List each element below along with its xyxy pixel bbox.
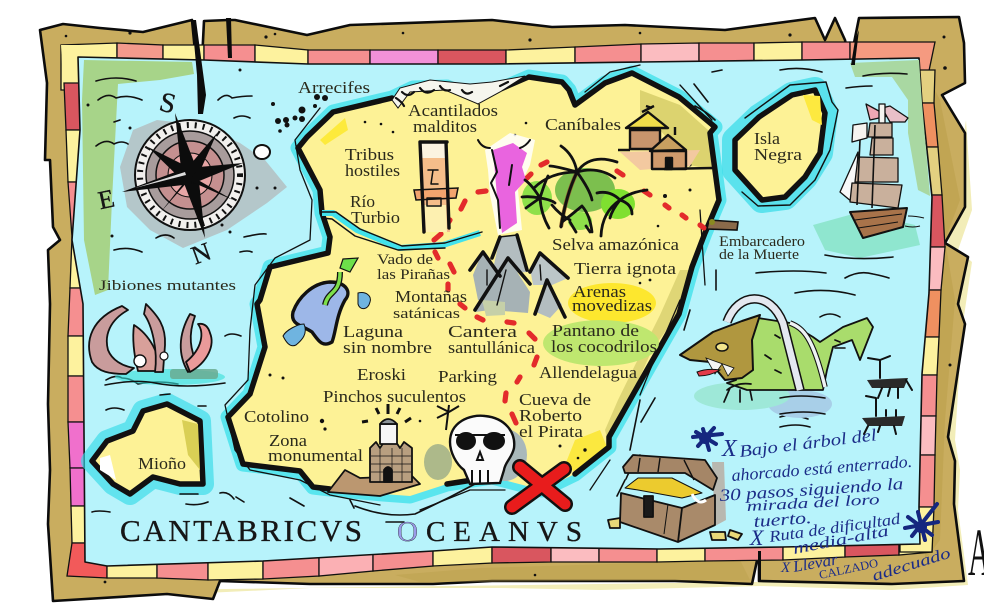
lighthouse bbox=[328, 404, 420, 496]
kraken bbox=[89, 304, 225, 386]
label: Cantera santullánica: Cantera bbox=[448, 322, 518, 341]
label: Embarcadero de la Muerte: Embarcadero bbox=[719, 234, 805, 250]
sea monster bbox=[680, 299, 873, 418]
jetty bbox=[707, 219, 738, 230]
small rock bbox=[254, 145, 270, 159]
volcano and Montañas satánicas bbox=[470, 235, 568, 318]
lagoon bbox=[283, 258, 370, 346]
label: Montañas satánicas: satánicas bbox=[393, 306, 460, 322]
island: Mioño bbox=[92, 404, 203, 494]
label: Montañas satánicas: Montañas bbox=[395, 287, 467, 306]
label: Laguna sin nombre: sin nombre bbox=[343, 338, 432, 357]
label: Cueva de Roberto el Pirata: Cueva de bbox=[519, 390, 591, 409]
label: Río Turbio bbox=[350, 192, 400, 227]
label: Pantano de los cocodrilos bbox=[551, 321, 657, 356]
jungle palms bbox=[522, 146, 647, 236]
label: Tribus hostiles: Tribus bbox=[345, 145, 394, 164]
label: Parking: Parking bbox=[438, 367, 497, 386]
label: Tribus hostiles bbox=[345, 145, 400, 180]
treasure chest bbox=[608, 455, 742, 542]
label: Isla Negra: Negra bbox=[754, 145, 803, 164]
label: Zona monumental bbox=[268, 431, 363, 465]
compass letter E: E bbox=[96, 184, 117, 215]
place labels bbox=[99, 78, 805, 473]
label: Cantera santullánica: santullánica bbox=[448, 338, 536, 357]
island: Isla Negra bbox=[735, 82, 838, 206]
cracks in parchment bbox=[192, 18, 859, 581]
label: Selva amazónica: Selva amazónica bbox=[552, 235, 680, 254]
label: Tribus hostiles: hostiles bbox=[345, 161, 400, 180]
reef dots bbox=[86, 68, 328, 238]
label: Arenas movedizas: movedizas bbox=[572, 296, 652, 315]
label: Embarcadero de la Muerte bbox=[719, 234, 805, 263]
label: Zona monumental: monumental bbox=[268, 446, 363, 465]
note line: mirada del loro: mirada del loro bbox=[746, 492, 881, 515]
note line: 30 pasos siguiendo la: 30 pasos siguiendo la bbox=[718, 474, 904, 505]
label: Cueva de Roberto el Pirata: Roberto bbox=[519, 406, 582, 425]
word: CANTABRICVS: CANTABRICVS bbox=[120, 513, 362, 548]
label: Cueva de Roberto el Pirata bbox=[519, 390, 591, 441]
label: Pantano de los cocodrilos: Pantano de bbox=[552, 321, 639, 340]
compass letter N: N bbox=[187, 237, 215, 270]
label: Zona monumental: Zona bbox=[269, 431, 308, 450]
label: Acantilados malditos: Acantilados bbox=[408, 101, 498, 120]
label: Pinchos suculentos: Pinchos suculentos bbox=[323, 387, 466, 406]
label: Montañas satánicas bbox=[393, 287, 467, 322]
note line: Llevar: Llevar bbox=[791, 551, 840, 576]
huts bbox=[618, 106, 712, 170]
tiki totem bbox=[414, 142, 458, 232]
label: Vado de las Pirañas: las Pirañas bbox=[377, 267, 450, 283]
compass letter S: S bbox=[156, 87, 179, 120]
wave marks bbox=[92, 68, 907, 522]
label: Cueva de Roberto el Pirata: el Pirata bbox=[519, 422, 584, 441]
word: OCEANVS: O CEANVS bbox=[397, 516, 582, 548]
label: Isla Negra: Isla bbox=[754, 129, 781, 148]
label: Acantilados malditos: malditos bbox=[413, 117, 477, 136]
label: Vado de las Pirañas bbox=[377, 252, 450, 283]
note line: Ruta de dificultad: Ruta de dificultad bbox=[767, 511, 902, 546]
note line: adecuado: adecuado bbox=[870, 545, 953, 585]
galleys bbox=[862, 356, 912, 434]
note line: CALZADO: CALZADO bbox=[818, 556, 880, 582]
ink splat bottom right bbox=[905, 504, 938, 540]
yellow wash: arenas movedizas bbox=[568, 283, 656, 323]
note: third X marker: X bbox=[780, 560, 791, 576]
island: main island bbox=[225, 65, 719, 510]
label: Cantera santullánica bbox=[448, 322, 536, 357]
ocean name bbox=[120, 513, 582, 548]
label: Vado de las Pirañas: Vado de bbox=[377, 252, 433, 268]
note line: media-alta: media-alta bbox=[792, 523, 890, 558]
label: Laguna sin nombre bbox=[343, 322, 432, 357]
label: Laguna sin nombre: Laguna bbox=[343, 322, 404, 341]
note line: tuerto: tuerto. bbox=[753, 508, 812, 531]
ship bbox=[840, 104, 924, 238]
label: Isla Negra bbox=[754, 129, 803, 164]
compass rose bbox=[120, 113, 287, 248]
handwritten treasure note bbox=[718, 425, 953, 585]
label: Arenas movedizas bbox=[572, 282, 652, 315]
label: Río Turbio: Río bbox=[350, 192, 375, 211]
label: Jibiones mutantes: Jibiones mutantes bbox=[99, 278, 236, 294]
label: Embarcadero de la Muerte: de la Muerte bbox=[719, 247, 799, 263]
border strip: coloured cells bbox=[61, 42, 945, 580]
white cliffs: acantilados bbox=[392, 76, 525, 108]
note line: Bajo el árbol del: Bajo el árbol del bbox=[738, 425, 878, 461]
note line: ahorcado está enterrado: ahorcado está enterrado. bbox=[731, 452, 913, 485]
label: Acantilados malditos bbox=[408, 101, 498, 136]
red X bbox=[512, 467, 565, 507]
label: Eroski: Eroski bbox=[357, 365, 406, 384]
label: Arrecifes: Arrecifes bbox=[298, 78, 370, 97]
label: Pantano de los cocodrilos: los cocodrilos bbox=[551, 337, 657, 356]
sea bbox=[72, 57, 932, 566]
label: Arenas movedizas: Arenas bbox=[573, 282, 626, 301]
label: Caníbales: Caníbales bbox=[545, 115, 621, 134]
green wash: pantano bbox=[543, 320, 659, 366]
label: Mioño: Mioño bbox=[138, 454, 186, 473]
label: Allendelagua: Allendelagua bbox=[539, 363, 638, 382]
ink splat top bbox=[693, 428, 722, 450]
skull bbox=[424, 405, 527, 484]
treasure route bbox=[434, 162, 704, 447]
note: second X marker: X bbox=[749, 525, 765, 550]
note: X marker: X bbox=[721, 436, 738, 462]
volcano smoke bbox=[478, 133, 535, 235]
label: Cotolino: Cotolino bbox=[244, 407, 309, 426]
label: Tierra ignota: Tierra ignota bbox=[574, 259, 677, 278]
label: Río Turbio: Turbio bbox=[351, 208, 400, 227]
